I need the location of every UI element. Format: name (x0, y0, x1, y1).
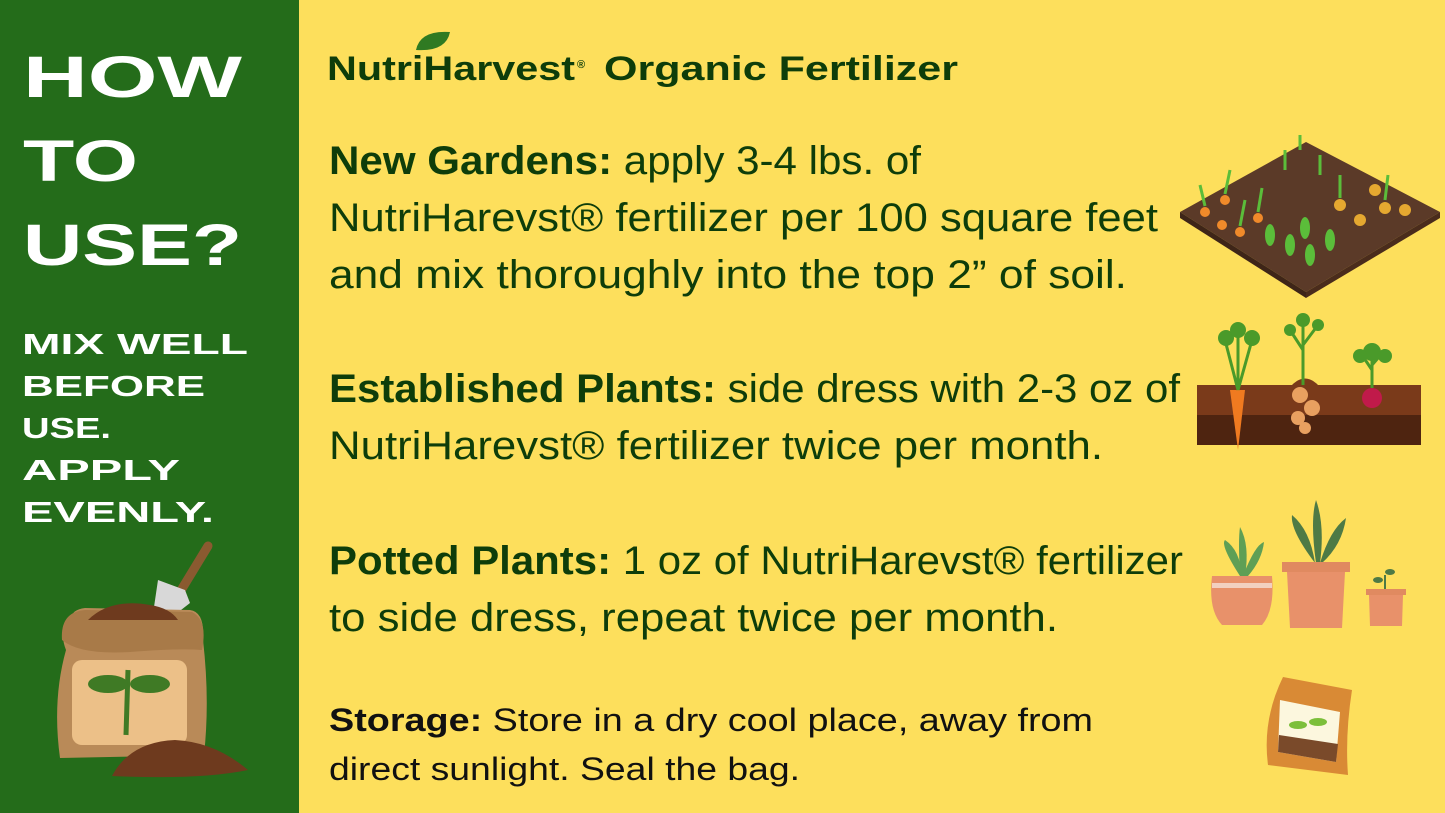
text: potted plants: Potted Plants: 1 oz of NutriHarevst® fertilizer (329, 539, 1183, 583)
title: NutriHarvest Organic Fertilizer (327, 32, 958, 88)
text: mix well instructions: MIX WELL (22, 329, 248, 361)
text: mix well instructions: APPLY (22, 455, 180, 487)
heading: how to use: USE? (23, 213, 242, 278)
text: new gardens: New Gardens: apply 3-4 lbs. of (329, 139, 922, 183)
title: NutriHarvest Organic Fertilizer: NutriHarvest (327, 50, 575, 88)
heading: how to use: HOW (23, 45, 242, 110)
text: storage (329, 702, 1093, 787)
text: new gardens (329, 139, 1158, 297)
text: established plants: Established Plants: side dress with 2-3 oz of (329, 367, 1181, 411)
icon: root vegetables in soil (1197, 313, 1421, 450)
panel: left green sidebar (0, 0, 299, 813)
text: storage: Storage: Store in a dry cool place, away from (329, 702, 1093, 738)
icon: leaf logo (416, 32, 450, 50)
text: mix well instructions: BEFORE (22, 371, 205, 403)
icon: fertilizer sack with trowel (57, 546, 248, 777)
title: NutriHarvest Organic Fertilizer: ® (577, 59, 585, 71)
icon: storage bag (1267, 677, 1352, 775)
heading: how to use: TO (23, 129, 138, 194)
text: established plants: NutriHarevst® fertilizer twice per month. (329, 424, 1103, 468)
text: new gardens: and mix thoroughly into the top 2” of soil. (329, 253, 1127, 297)
text: potted plants: to side dress, repeat twice per month. (329, 596, 1058, 640)
title: NutriHarvest Organic Fertilizer: Organic Fertilizer (604, 50, 958, 88)
text: established plants (329, 367, 1181, 468)
text: new gardens: NutriHarevst® fertilizer per 100 square feet (329, 196, 1158, 240)
text: storage: direct sunlight. Seal the bag. (329, 751, 800, 787)
text: mix well instructions: USE. (22, 413, 111, 445)
text: mix well instructions: EVENLY. (22, 497, 214, 529)
heading: how to use (23, 45, 242, 278)
icon: potted plants (1211, 500, 1406, 628)
icon: garden bed (1180, 135, 1440, 298)
text: mix well instructions (22, 329, 248, 529)
text: potted plants (329, 539, 1183, 640)
